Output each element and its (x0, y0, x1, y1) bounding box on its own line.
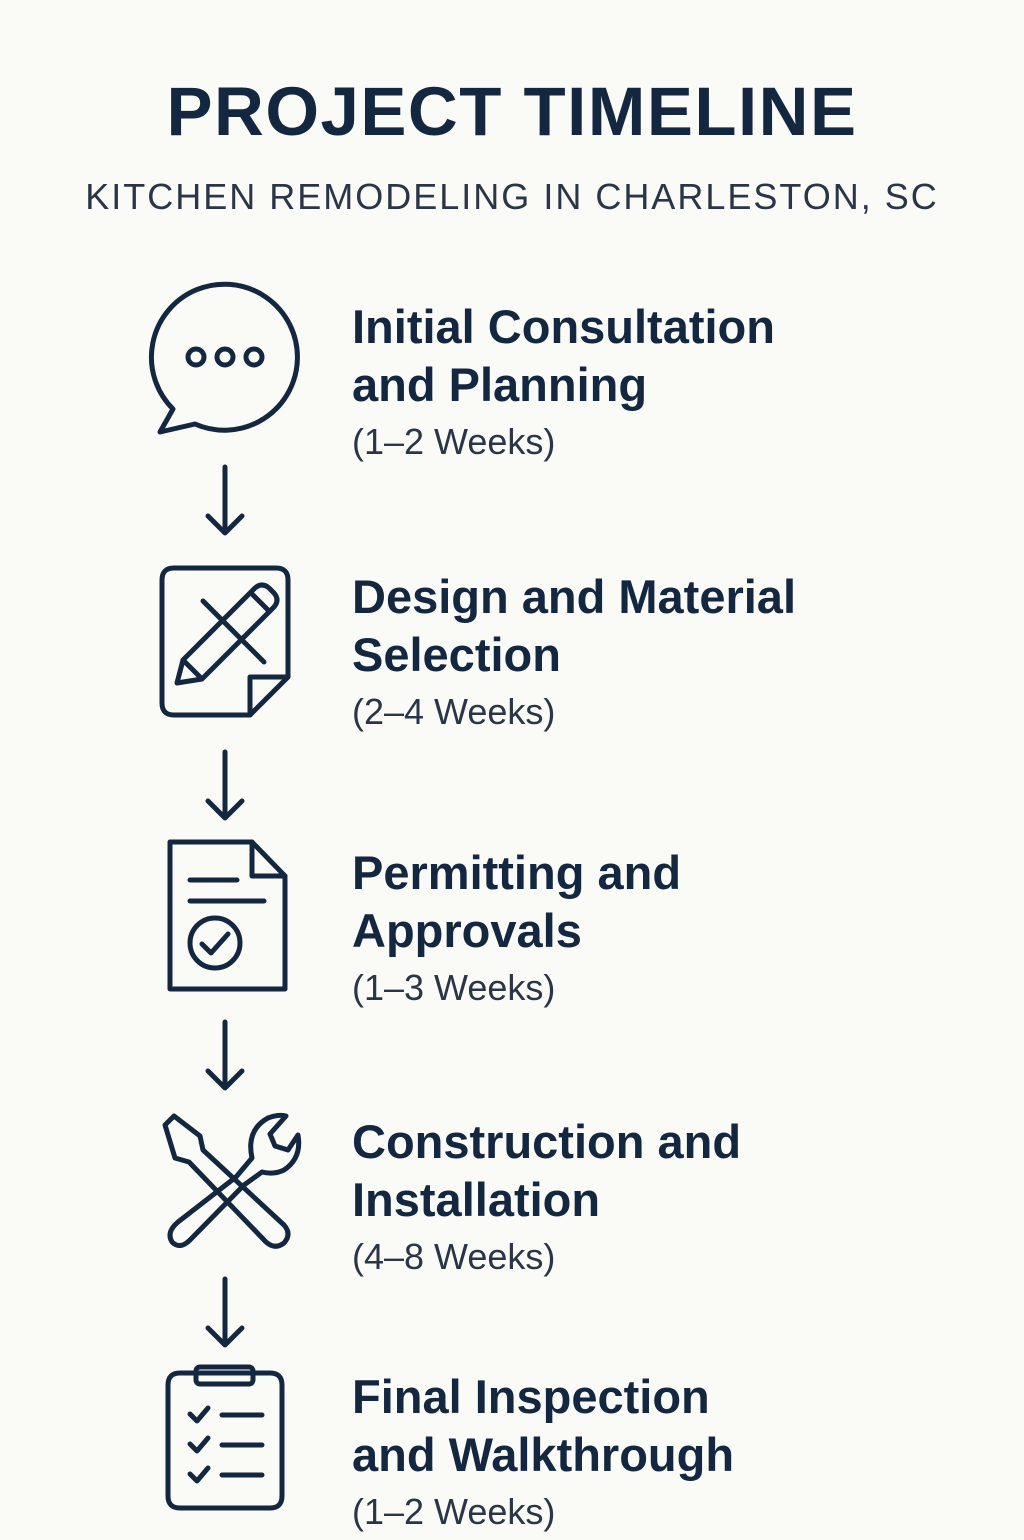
step 1 text: (1–2 Weeks) (352, 421, 555, 462)
icon: pencil on paper (162, 568, 288, 715)
arrow 3 (208, 1022, 242, 1088)
step 5 text: (1–2 Weeks) (352, 1491, 555, 1532)
step 5 text (352, 1370, 734, 1532)
arrow 2 (208, 752, 242, 818)
step 2 text (352, 570, 796, 732)
step 4 text: Installation (352, 1173, 600, 1226)
arrow 4 (208, 1279, 242, 1345)
step 3 text (352, 846, 681, 1008)
step 2 text: (2–4 Weeks) (352, 691, 555, 732)
title: PROJECT TIMELINE (166, 73, 858, 150)
icon: chat bubble (151, 284, 297, 432)
step 4 text: Construction and (352, 1115, 741, 1168)
step 1 text (352, 300, 775, 462)
icon: tools (165, 1115, 299, 1246)
step 4 text (352, 1115, 741, 1277)
step 2 text: Design and Material (352, 570, 796, 623)
arrow 1 (208, 467, 242, 533)
step 2 text: Selection (352, 628, 561, 681)
step 1 text: and Planning (352, 358, 647, 411)
step 5 text: Final Inspection (352, 1370, 710, 1423)
icon: document with check (170, 842, 285, 989)
step 1 text: Initial Consultation (352, 300, 775, 353)
subtitle: KITCHEN REMODELING IN CHARLESTON, SC (85, 176, 939, 217)
step 3 text: (1–3 Weeks) (352, 967, 555, 1008)
step 3 text: Approvals (352, 904, 582, 957)
icon: clipboard checklist (168, 1367, 282, 1508)
step 4 text: (4–8 Weeks) (352, 1236, 555, 1277)
step 5 text: and Walkthrough (352, 1428, 734, 1481)
step 3 text: Permitting and (352, 846, 681, 899)
